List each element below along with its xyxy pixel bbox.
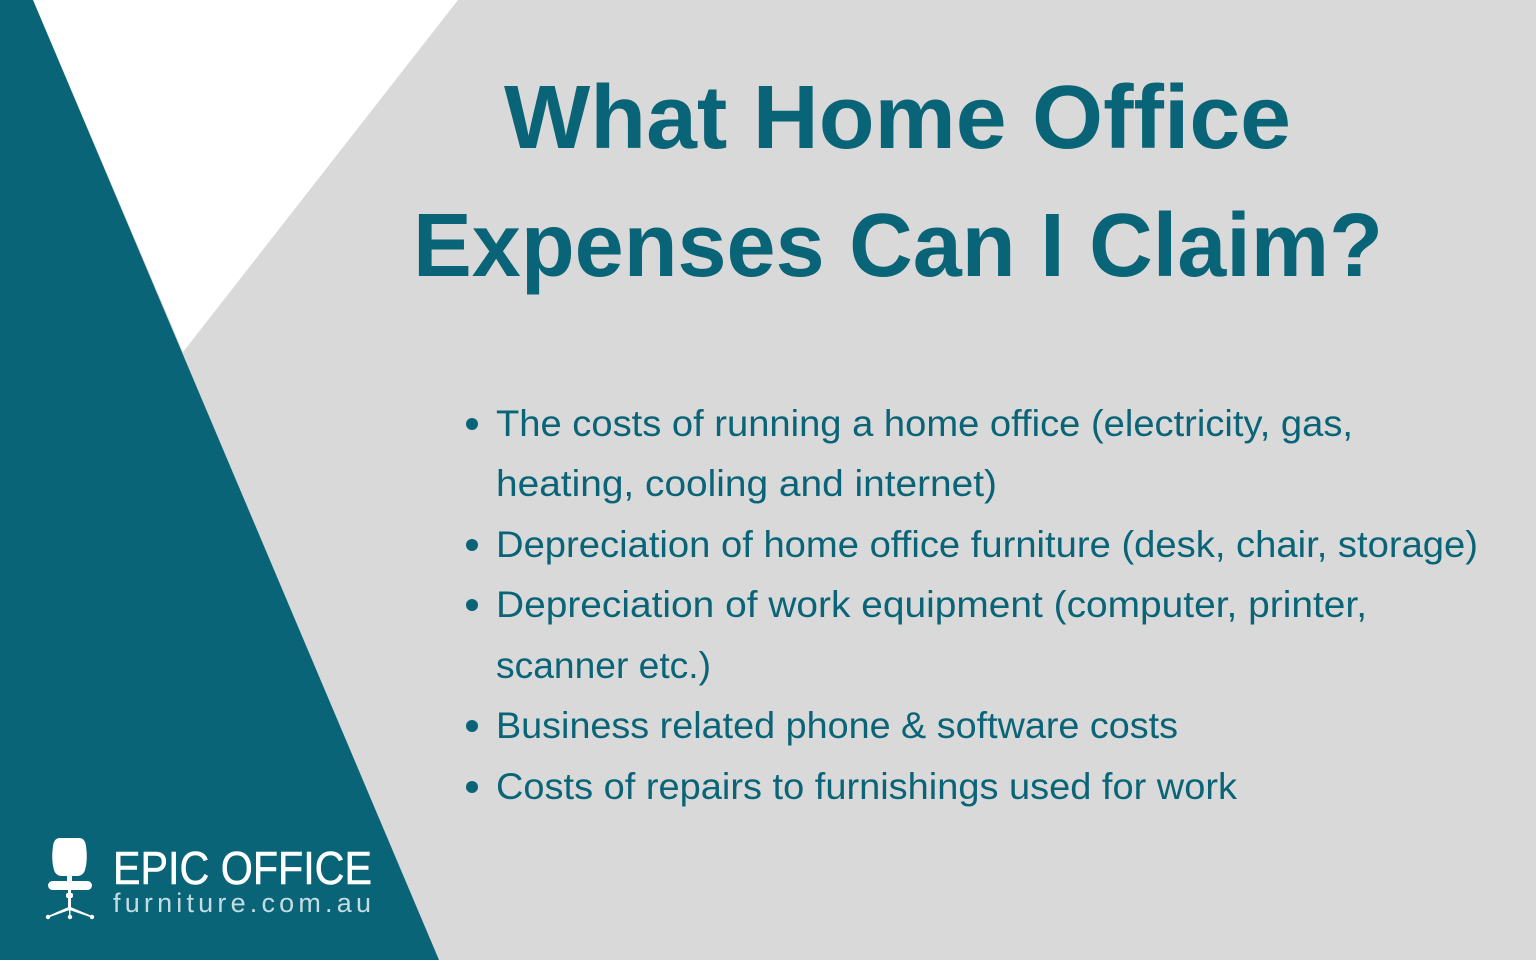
bullet list: [466, 403, 1478, 807]
bullet item: running costs: [466, 403, 1353, 504]
bullet item: equipment depreciation: [466, 584, 1367, 686]
panel: white triangle: [33, 0, 458, 352]
bullet item: phone and software: Business related phone & software costs: [496, 705, 1178, 746]
logo web address: furniture.com.au: [113, 888, 371, 918]
icon: office chair: [46, 838, 94, 919]
logo: [46, 838, 372, 919]
bullet item: equipment depreciation: Depreciation of work equipment (computer, printer,: [496, 584, 1367, 625]
bullet item: equipment depreciation: scanner etc.): [496, 645, 711, 686]
title: What Home Office: [504, 68, 1291, 168]
bullet item: running costs: The costs of running a home office (electricity, gas,: [496, 403, 1353, 444]
bullet item: repairs: Costs of repairs to furnishings used for work: [496, 766, 1238, 807]
logo wordmark: EPIC OFFICE: [113, 842, 372, 894]
panel: teal triangle: [0, 0, 439, 960]
title: [413, 68, 1383, 296]
bullet item: furniture depreciation: Depreciation of home office furniture (desk, chair, storage): [496, 524, 1478, 565]
bullet item: running costs: heating, cooling and internet): [496, 463, 997, 504]
title: Expenses Can I Claim?: [413, 196, 1383, 296]
